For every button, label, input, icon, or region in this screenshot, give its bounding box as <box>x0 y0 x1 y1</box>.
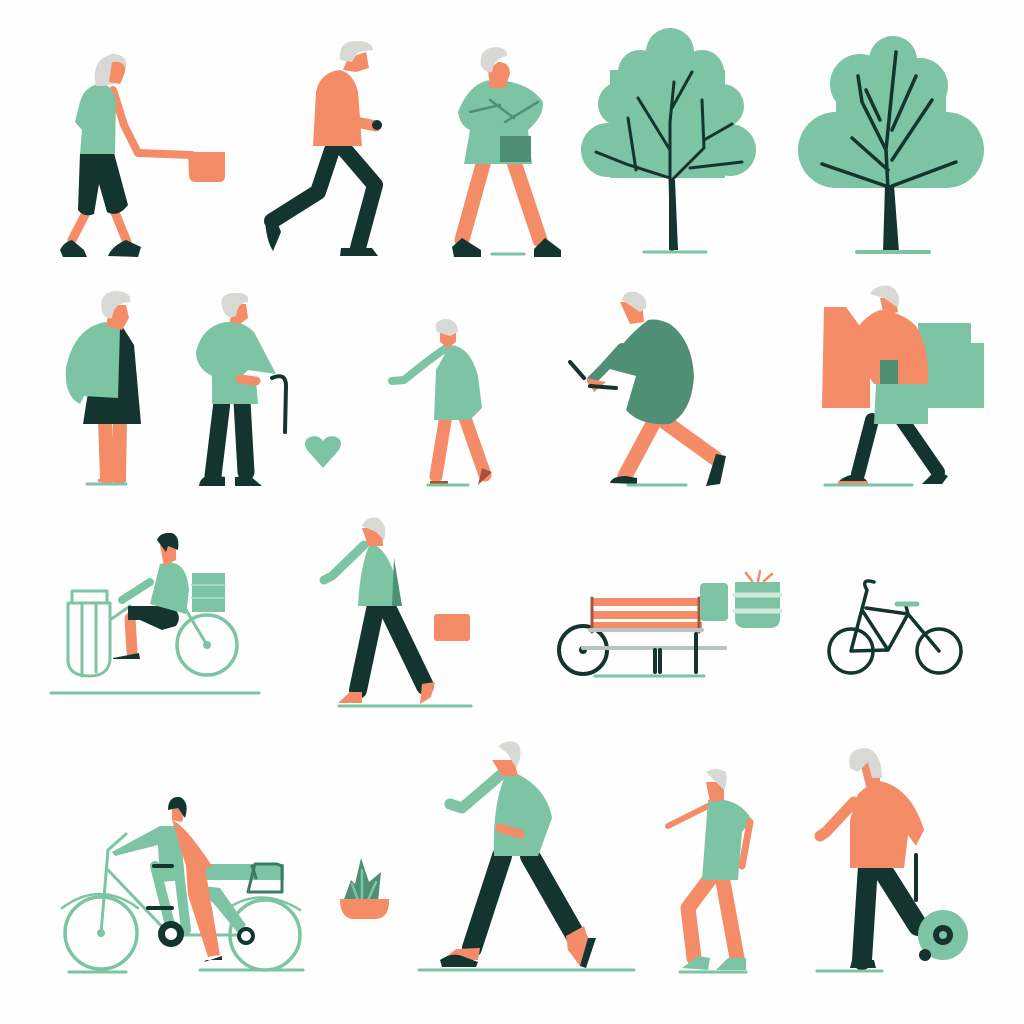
figure: older man in mint tee <box>668 769 752 972</box>
figure: woman pushing coral box <box>60 54 225 257</box>
figure: man running in coral sweater <box>265 41 382 256</box>
icon: tree two <box>798 36 984 252</box>
icon: park bench with wheel <box>559 571 780 676</box>
icon: tree one <box>581 28 756 252</box>
figure: woman in mint coat <box>452 47 561 257</box>
figure: standing woman in mint cardigan <box>66 291 141 484</box>
figure: small man reaching <box>392 319 492 485</box>
figure: person with mint bicycle <box>62 797 303 972</box>
figure: man walking in mint top <box>324 518 471 706</box>
icon: mint heart <box>305 436 341 468</box>
figure: person carrying large boxes <box>822 286 984 485</box>
icon: potted plant <box>340 858 389 919</box>
icon: black bicycle <box>829 581 961 673</box>
figure: older man with cane <box>196 293 286 486</box>
figure: person in dark green holding tablet <box>570 292 726 486</box>
figure: large man striding <box>419 741 634 970</box>
figure: cyclist with outlined cargo bike <box>51 533 259 693</box>
figure: older woman with wheel <box>817 748 968 971</box>
